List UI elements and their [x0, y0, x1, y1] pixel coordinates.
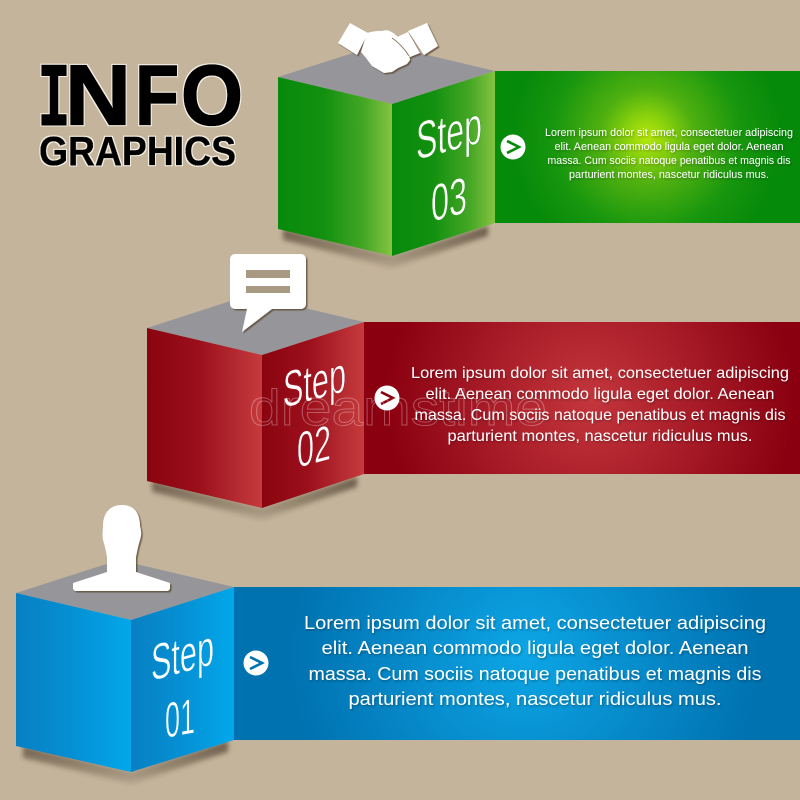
cube top: step 02	[147, 295, 364, 355]
band: step 01 text panel	[234, 587, 800, 740]
cube left face: step 01	[16, 593, 131, 772]
panel: step 02 red	[147, 254, 800, 520]
icon: speech bubble	[230, 254, 306, 332]
step label: Step 03: 03	[431, 166, 467, 234]
text block: step 02 description	[411, 365, 789, 445]
title: INFO GRAPHICS: N	[65, 48, 131, 144]
icon: person	[73, 505, 170, 591]
watermark: dreamstime	[249, 380, 547, 436]
text block: step 02 description: massa. Cum sociis natoque penatibus et magnis dis	[414, 407, 786, 424]
step label: Step 02	[283, 345, 346, 479]
cube left face: step 03	[278, 77, 392, 256]
cube right face: step 01	[131, 587, 234, 772]
step label: Step 02: 02	[297, 414, 331, 479]
title: INFO GRAPHICS: I	[37, 50, 71, 145]
step label: Step 03	[416, 95, 482, 234]
band: step 02 text panel	[364, 322, 800, 474]
step label: Step 03: Step	[416, 95, 482, 172]
text block: step 01 description: elit. Aenean commodo ligula eget dolor. Aenean	[322, 637, 748, 658]
band: step 03 text panel	[495, 71, 800, 223]
icon: arrow circle	[500, 134, 526, 160]
step label: Step 01	[151, 618, 214, 749]
text block: step 03 description: parturient montes, nascetur ridiculus mus.	[569, 169, 769, 181]
text block: step 01 description: parturient montes, nascetur ridiculus mus.	[348, 688, 722, 709]
title: INFO GRAPHICS: GRAPHICS	[39, 128, 236, 174]
text block: step 03 description: Lorem ipsum dolor sit amet, consectetuer adipiscing	[545, 127, 793, 139]
cube left face: step 02	[147, 328, 262, 508]
icon: handshake	[338, 23, 438, 73]
title: INFO GRAPHICS: F	[135, 48, 179, 144]
text block: step 03 description	[545, 127, 793, 181]
panel: step 03 green	[278, 23, 800, 268]
text block: step 01 description: massa. Cum sociis natoque penatibus et magnis dis	[308, 663, 762, 684]
step label: Step 01: Step	[151, 618, 214, 692]
cube right face: step 02	[262, 322, 364, 508]
icon: arrow circle	[374, 386, 400, 410]
cube right face: step 03	[392, 71, 495, 256]
cube shadow: step 03	[283, 226, 488, 268]
text block: step 02 description: Lorem ipsum dolor sit amet, consectetuer adipiscing	[411, 365, 789, 382]
cube top: step 03	[278, 44, 495, 104]
text block: step 03 description: elit. Aenean commodo ligula eget dolor. Aenean	[554, 141, 784, 153]
cube top: step 01	[16, 560, 234, 620]
text block: step 01 description	[304, 612, 766, 709]
panel: step 01 blue	[16, 505, 800, 784]
text block: step 02 description: parturient montes, nascetur ridiculus mus.	[448, 428, 752, 445]
cube shadow: step 02	[152, 477, 357, 520]
step label: Step 02: Step	[283, 345, 346, 419]
title: INFO GRAPHICS: O	[181, 48, 243, 144]
step label: Step 01: 01	[165, 687, 195, 749]
title: INFO GRAPHICS	[37, 48, 243, 174]
text block: step 01 description: Lorem ipsum dolor sit amet, consectetuer adipiscing	[304, 612, 766, 633]
text block: step 02 description: elit. Aenean commodo ligula eget dolor. Aenean	[426, 386, 774, 403]
icon: arrow circle	[244, 650, 268, 676]
text block: step 03 description: massa. Cum sociis natoque penatibus et magnis dis	[548, 155, 790, 167]
cube shadow: step 01	[23, 741, 228, 784]
